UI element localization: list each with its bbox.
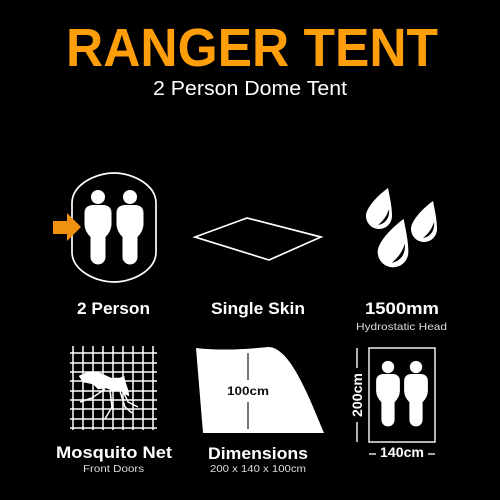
label: 1500mm: 1500mm bbox=[365, 300, 439, 318]
height marker top bbox=[247, 353, 249, 380]
icon: mosquito bbox=[79, 372, 138, 419]
icon: tent floor outline bbox=[72, 173, 156, 282]
panel: dimensions bbox=[196, 347, 324, 475]
label: 200cm: 200cm bbox=[350, 373, 365, 417]
title: RANGER TENT bbox=[66, 18, 438, 78]
icon: tent side profile bbox=[196, 347, 324, 433]
icon: person left bbox=[376, 361, 400, 426]
label: front doors: Front Doors bbox=[83, 463, 144, 475]
label: mosquito net: Mosquito Net bbox=[56, 444, 173, 462]
icon: orange arrow bbox=[53, 213, 81, 241]
label: 100cm: 100cm bbox=[227, 386, 269, 398]
panel: mosquito net bbox=[56, 346, 173, 475]
label: dimensions: Dimensions bbox=[208, 445, 308, 463]
label: size values: 200 x 140 x 100cm bbox=[210, 463, 306, 475]
label: 2 person: 2 Person bbox=[77, 300, 150, 318]
icon: water drop centre bbox=[378, 219, 408, 267]
label: hydrostatic head: Hydrostatic Head bbox=[356, 321, 447, 333]
icon: water drop left bbox=[366, 188, 392, 229]
height marker bottom bbox=[247, 402, 249, 429]
marker: height bars bbox=[356, 348, 358, 442]
icon: groundsheet diamond bbox=[195, 218, 321, 260]
icon: person left bbox=[84, 190, 112, 264]
panel: hydrostatic head bbox=[356, 188, 447, 333]
icon: person right bbox=[116, 190, 144, 264]
panel: floor plan bbox=[350, 348, 435, 460]
marker: width bars bbox=[369, 453, 435, 455]
icon: floor rectangle bbox=[369, 348, 435, 442]
label: single skin: Single Skin bbox=[211, 300, 305, 318]
icon: net grid bbox=[70, 346, 157, 430]
icon: water drop right bbox=[411, 201, 437, 242]
subtitle: 2 Person Dome Tent bbox=[153, 78, 347, 100]
icon: person right bbox=[404, 361, 428, 426]
panel: single skin bbox=[195, 218, 321, 318]
panel: 2 person bbox=[53, 173, 156, 318]
label: 140cm: 140cm bbox=[380, 445, 424, 460]
